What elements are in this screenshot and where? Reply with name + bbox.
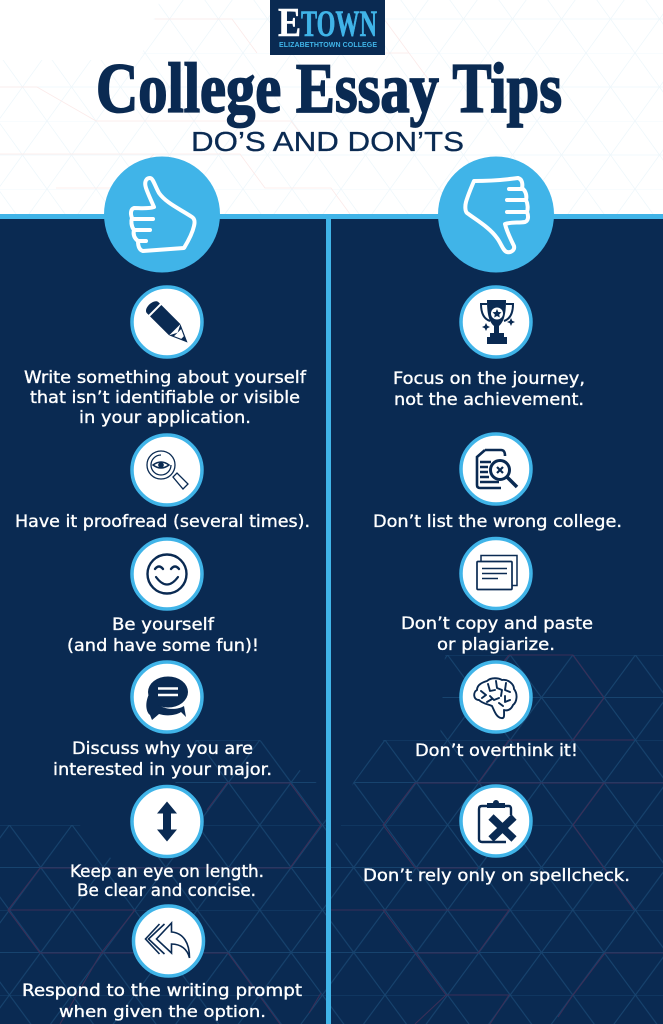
tip: writing prompt: Respond to the writing prompt	[22, 981, 303, 1000]
tip: plagiarize: or plagiarize.	[437, 635, 555, 654]
icon: stacked pages	[461, 538, 531, 608]
icon: vertical double arrow	[132, 786, 202, 856]
tip: journey: not the achievement.	[394, 390, 584, 409]
panel: do's	[15, 287, 310, 1021]
tip: length: Keep an eye on length.	[70, 862, 264, 881]
tip: be yourself	[67, 539, 259, 655]
icon: reply arrows	[134, 906, 204, 976]
navy panel background	[0, 214, 663, 1024]
tip: proofread: Have it proofread (several times).	[15, 512, 310, 531]
icon: smiley	[132, 539, 202, 609]
tip: plagiarize: Don’t copy and paste	[401, 614, 593, 633]
icon: pencil	[132, 287, 202, 357]
subtitle: DO’S AND DON’TS	[191, 126, 464, 157]
title: College Essay Tips	[96, 50, 562, 128]
icon: document with magnifier	[461, 434, 531, 504]
panel: don'ts	[363, 287, 630, 885]
icon: trophy	[461, 287, 531, 357]
tip: write about yourself	[24, 287, 307, 427]
tip: discuss major: interested in your major.	[53, 760, 272, 779]
tip: discuss major: Discuss why you are	[72, 739, 253, 758]
tip: write about yourself: Write something about yourself	[24, 368, 307, 387]
tip: length	[70, 786, 264, 900]
tip: be yourself: (and have some fun)!	[67, 636, 259, 655]
tip: wrong college	[373, 434, 622, 531]
tip: spellcheck	[363, 786, 630, 885]
tip: be yourself: Be yourself	[112, 615, 215, 634]
tip: wrong college: Don’t list the wrong college.	[373, 512, 622, 531]
tip: plagiarize	[401, 538, 593, 654]
tip: proofread	[15, 435, 310, 531]
logo: TOWN	[301, 4, 377, 45]
tip: write about yourself: in your application.	[79, 408, 251, 427]
logo: E	[278, 0, 301, 45]
tip: journey: Focus on the journey,	[393, 369, 585, 388]
icon: brain	[461, 662, 531, 732]
tip: write about yourself: that isn’t identifiable or visible	[30, 388, 300, 407]
icon: thumbs down	[438, 156, 554, 272]
tip: discuss major	[53, 662, 272, 779]
blue vertical divider	[326, 219, 331, 1024]
logo	[270, 0, 385, 55]
icon: magnifying glass with eye	[132, 435, 202, 505]
tip: overthink	[415, 662, 578, 760]
tip: length: Be clear and concise.	[77, 881, 256, 900]
icon: thumbs up	[104, 156, 220, 272]
white header background	[0, 0, 663, 214]
tip: spellcheck: Don’t rely only on spellcheck.	[363, 866, 630, 885]
tip: writing prompt	[22, 906, 303, 1021]
icon: chat bubbles	[132, 662, 202, 732]
tip: writing prompt: when given the option.	[59, 1002, 266, 1021]
tip: overthink: Don’t overthink it!	[415, 741, 578, 760]
icon: clipboard with x	[461, 786, 531, 856]
blue divider stripe	[0, 214, 663, 219]
logo: ELIZABETHTOWN COLLEGE	[279, 42, 377, 49]
tip: journey	[393, 287, 585, 409]
